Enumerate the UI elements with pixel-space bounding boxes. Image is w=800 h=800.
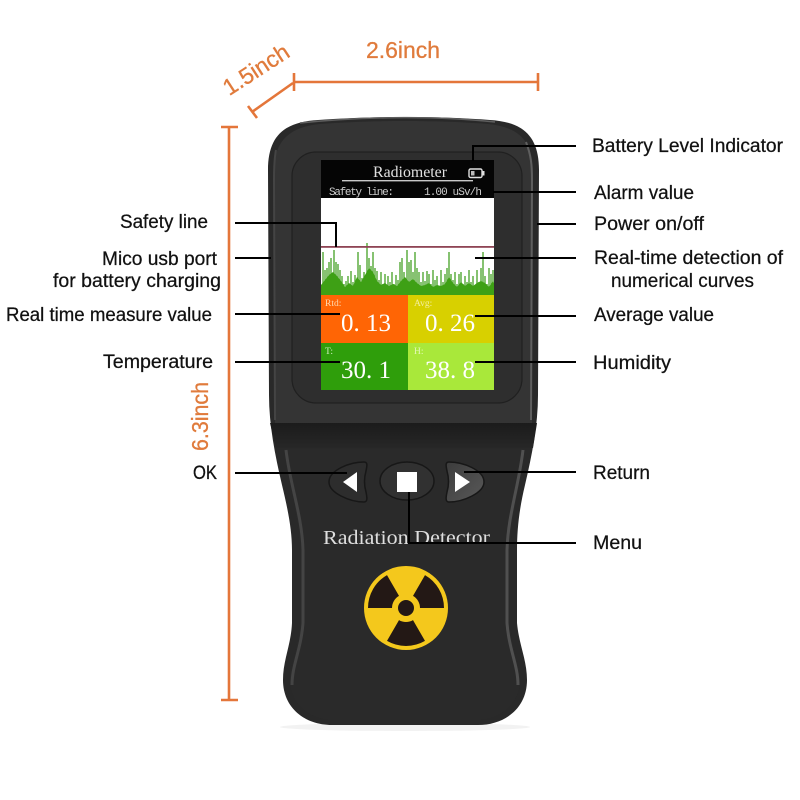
callout: real-time curves bbox=[475, 248, 784, 292]
device body bbox=[268, 117, 539, 731]
callout: OK: OK bbox=[193, 463, 217, 484]
icon: battery bbox=[469, 169, 484, 178]
device name: Radiation Detector bbox=[323, 527, 490, 549]
screen header: 1.00 uSv/h bbox=[424, 187, 482, 199]
upper housing bbox=[274, 121, 533, 424]
callout: real-time curves: Real-time detection of bbox=[594, 248, 784, 269]
safety line marker bbox=[321, 246, 494, 248]
cell: average value: 0. 26 bbox=[425, 310, 475, 337]
cell: real-time value: 0. 13 bbox=[341, 310, 391, 337]
cell: temperature bbox=[321, 343, 408, 390]
lower panel edge highlights bbox=[286, 450, 523, 685]
dark band bbox=[270, 423, 537, 448]
button: left bbox=[329, 462, 367, 502]
screen header bbox=[321, 160, 494, 199]
button: menu bbox=[380, 462, 434, 500]
cell: temperature: 30. 1 bbox=[341, 357, 391, 384]
lower panel bbox=[284, 449, 525, 720]
cell: temperature: T: bbox=[325, 347, 333, 357]
dimension: height: 6.3inch bbox=[187, 382, 213, 451]
cell: humidity: H: bbox=[414, 347, 424, 357]
dimension: width: 2.6inch bbox=[366, 37, 440, 63]
cell: average value bbox=[408, 295, 494, 343]
callout: menu: Menu bbox=[593, 533, 642, 554]
callout: return: Return bbox=[593, 463, 650, 484]
callout: average: Average value bbox=[594, 305, 714, 326]
screen bbox=[321, 160, 494, 390]
callout: usb port: Mico usb port bbox=[102, 249, 218, 270]
callout: usb port: for battery charging bbox=[53, 271, 221, 292]
callout: power: Power on/off bbox=[594, 214, 705, 235]
chart: real-time curve bbox=[321, 198, 494, 295]
cell: real-time value: Rtd: bbox=[325, 299, 341, 309]
callout: humidity: Humidity bbox=[593, 353, 672, 374]
callout: real-time curves: numerical curves bbox=[611, 271, 754, 292]
callout: battery level bbox=[473, 136, 784, 161]
icon: radiation symbol bbox=[364, 566, 448, 650]
callout: battery level: Battery Level Indicator bbox=[592, 136, 784, 157]
cell: humidity: 38. 8 bbox=[425, 357, 475, 384]
cell: real-time value bbox=[321, 295, 408, 343]
dimension: depth: 1.5inch bbox=[218, 38, 294, 100]
callout: safety line bbox=[120, 212, 336, 247]
callout: alarm value: Alarm value bbox=[594, 183, 694, 204]
callout: real time measure value: Real time measure value bbox=[6, 305, 212, 326]
dimension: height bbox=[187, 127, 238, 700]
screen bezel bbox=[292, 152, 522, 403]
cell: average value: Avg: bbox=[414, 299, 432, 309]
callout: safety line: Safety line bbox=[120, 212, 208, 233]
callout: temperature: Temperature bbox=[103, 352, 213, 373]
screen title: Radiometer bbox=[373, 164, 448, 181]
button: right bbox=[446, 462, 484, 502]
dimension: width bbox=[294, 37, 538, 91]
callout: usb port bbox=[53, 249, 271, 292]
cell: humidity bbox=[408, 343, 494, 390]
housing edge highlights bbox=[274, 118, 532, 420]
callout: menu bbox=[409, 492, 642, 554]
safety line value: Safety line: bbox=[329, 187, 394, 199]
